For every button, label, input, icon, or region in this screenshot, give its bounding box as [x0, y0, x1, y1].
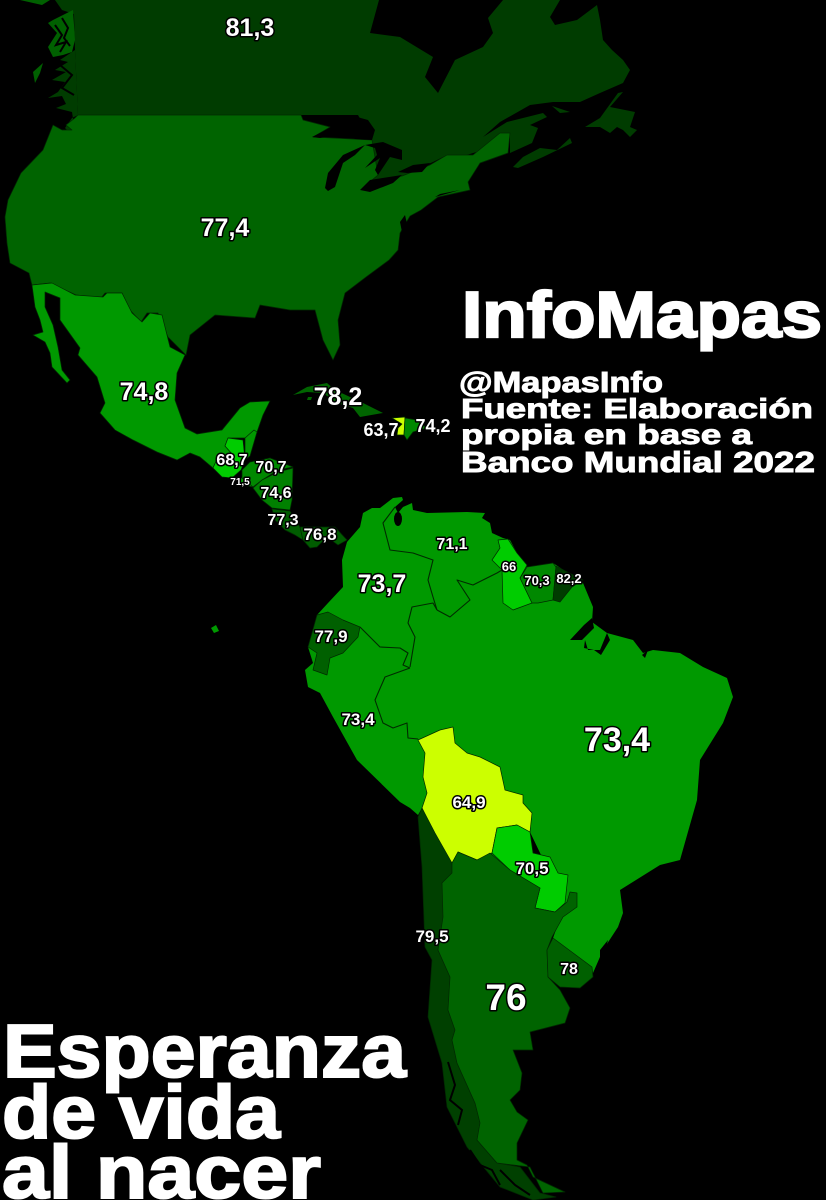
country: Bolivia	[418, 727, 532, 863]
title: de vida	[2, 1070, 281, 1154]
country: Chile	[418, 808, 556, 1200]
country: Suriname	[520, 563, 556, 603]
title	[2, 1009, 407, 1200]
country: Guatemala	[213, 438, 245, 478]
Patagonian fjords	[448, 1062, 530, 1195]
value labels: 63,7	[363, 420, 399, 440]
country: Honduras	[242, 458, 293, 487]
source text block: Fuente: Elaboración	[461, 393, 813, 424]
value labels: 71,5	[230, 477, 250, 488]
country: Paraguay	[492, 825, 568, 912]
value labels	[120, 14, 650, 1018]
source text block	[459, 367, 815, 479]
country: Uruguay	[547, 938, 593, 988]
country: El Salvador	[232, 478, 253, 487]
value labels: 77,9	[314, 627, 348, 646]
value labels: 73,4	[584, 721, 650, 759]
value labels: 74,6	[260, 485, 292, 502]
Alaska panhandle fragments	[20, 0, 75, 83]
value labels: 70,3	[524, 573, 550, 588]
value labels: 68,7	[216, 452, 248, 469]
value labels: 81,3	[226, 14, 274, 42]
country: Belize	[245, 430, 257, 460]
value labels: 73,4	[341, 710, 375, 729]
value labels: 73,7	[358, 570, 406, 598]
fjord streaks	[55, 18, 74, 95]
country: Ecuador	[308, 612, 360, 675]
value labels: 64,9	[452, 793, 486, 812]
value labels: 76	[485, 977, 527, 1018]
value labels: 70,5	[515, 859, 549, 878]
country: United States	[5, 115, 510, 360]
value labels: 79,5	[415, 927, 449, 946]
country: Galapagos	[211, 625, 219, 633]
country: Guyana	[492, 539, 532, 610]
value labels: 77,3	[267, 512, 299, 529]
Great Lakes	[312, 115, 460, 232]
source text block: propia en base a	[461, 419, 753, 450]
South America mainland (Colombia, Venezuela, Peru, Brazil)	[305, 497, 733, 973]
source text block: @MapasInfo	[459, 367, 663, 399]
value labels: 82,2	[556, 571, 582, 586]
Amazon delta	[394, 512, 648, 958]
country: Argentina	[438, 852, 577, 1193]
country: Mexico	[32, 283, 270, 468]
title: Esperanza	[3, 1009, 407, 1093]
value labels: 74,2	[415, 416, 451, 436]
border lines	[360, 507, 502, 739]
country: Cuba	[293, 383, 383, 417]
value labels: 77,4	[201, 214, 249, 242]
value labels: 74,8	[120, 378, 168, 406]
country: Haiti	[392, 417, 405, 435]
value labels: 66	[502, 559, 516, 574]
country: French Guiana	[553, 566, 583, 602]
country: Jamaica	[307, 397, 312, 400]
value labels: 70,7	[255, 459, 287, 476]
country: Panama	[300, 527, 347, 548]
country: Dominican Republic	[404, 418, 427, 440]
value labels: 76,8	[303, 525, 337, 544]
value labels: 78,2	[314, 383, 362, 411]
value labels: 78	[560, 961, 578, 978]
country: Canada	[48, 0, 637, 180]
country: Nicaragua	[253, 468, 293, 510]
value labels: 71,1	[436, 536, 468, 553]
country: Costa Rica	[272, 509, 303, 540]
brand heading: InfoMapas	[462, 278, 822, 351]
source text block: Banco Mundial 2022	[461, 447, 815, 479]
